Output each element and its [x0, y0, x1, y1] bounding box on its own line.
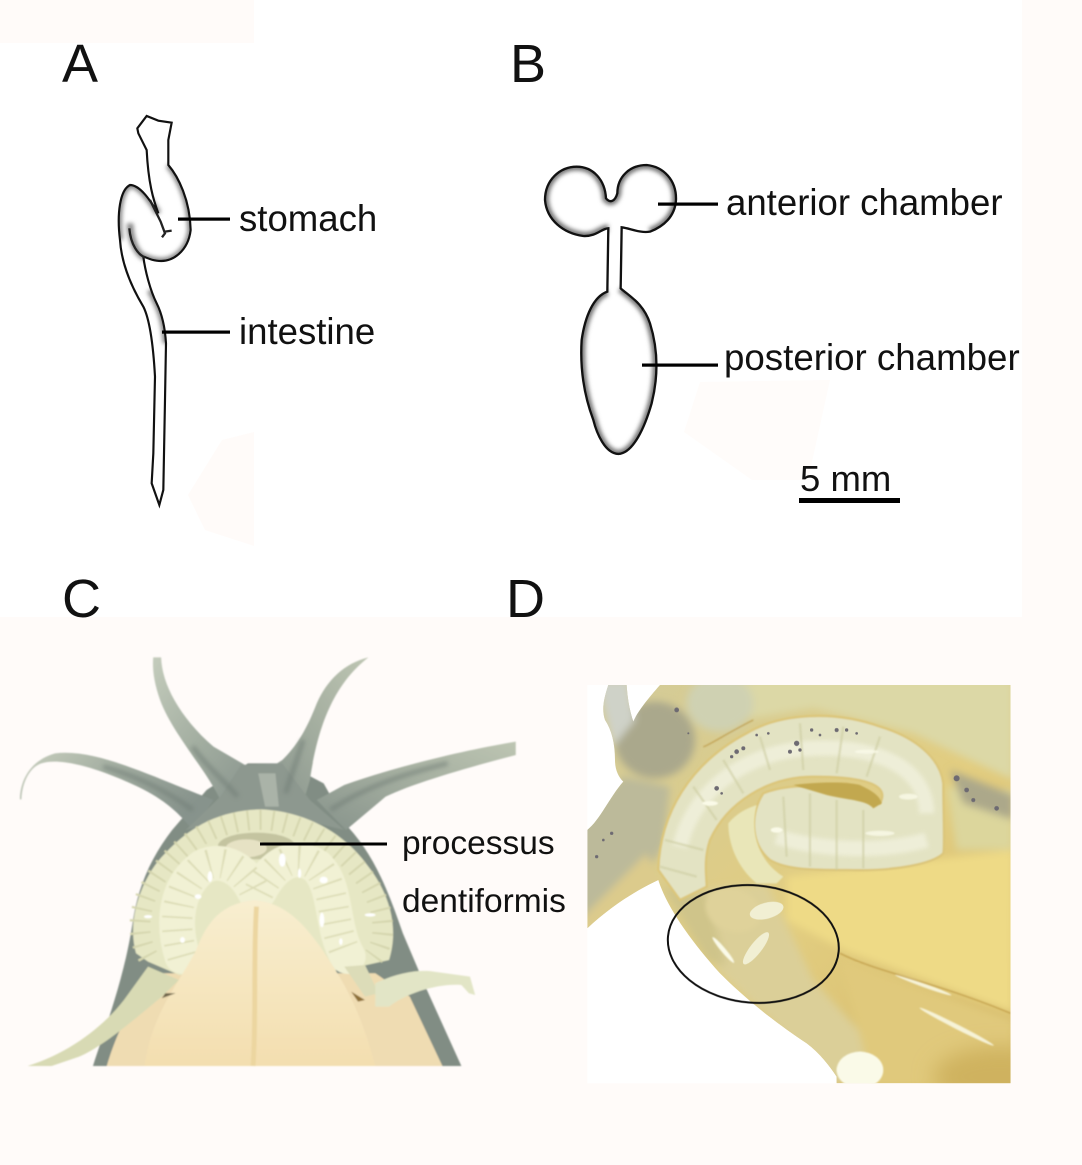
leader line: posterior chamber	[642, 364, 718, 367]
dark speckles	[595, 708, 999, 858]
mouth and processus dentiformis	[218, 833, 295, 859]
label: stomach: stomach	[239, 198, 377, 239]
leader line: stomach	[178, 218, 230, 221]
circled detail	[663, 878, 844, 1010]
scale bar	[799, 498, 900, 503]
lip band	[658, 716, 944, 900]
foot	[145, 900, 375, 1066]
panel letter C: C	[62, 569, 101, 629]
photo: close-up of lip with circled detail	[587, 685, 1011, 1084]
lower right shade	[930, 1041, 1011, 1084]
scale bar label: 5 mm	[800, 458, 891, 499]
panel D: close-up photograph	[510, 580, 1011, 1084]
label: intestine: intestine	[239, 311, 375, 352]
leader line: anterior chamber	[658, 202, 718, 206]
leader line: intestine	[162, 330, 230, 334]
leader line: processus dentiformis	[260, 842, 387, 846]
outer lip	[140, 820, 383, 957]
label: posterior chamber: posterior chamber	[724, 337, 1020, 378]
white upper panel background	[0, 0, 1022, 617]
panel C: snail head photograph	[20, 569, 566, 1066]
label: anterior chamber: anterior chamber	[726, 182, 1002, 223]
label: processus dentiformis	[402, 825, 566, 920]
lip glow	[680, 748, 927, 848]
tentacle top right	[262, 657, 368, 803]
lip highlights	[144, 853, 376, 945]
segment shading	[660, 723, 880, 877]
highlights	[702, 750, 995, 1088]
tentacle dark streaks	[103, 740, 448, 810]
side body	[107, 973, 442, 1066]
drawing: stomach and intestine	[119, 116, 191, 505]
lip base	[133, 809, 393, 975]
head centre	[186, 763, 344, 830]
inner crescent	[728, 805, 783, 883]
white grains	[742, 902, 784, 965]
tentacle top left	[153, 657, 269, 800]
body mantle	[93, 763, 461, 1066]
tinted patch right	[684, 380, 830, 480]
inner lip	[177, 860, 348, 957]
tentacle left	[20, 753, 213, 830]
soft colour zones	[580, 675, 1013, 1087]
label: processus dentiformis: dentiformis	[402, 883, 566, 920]
lower right stub	[344, 965, 379, 997]
panel B: anterior and posterior chambers	[510, 34, 1020, 503]
lower left tentacle	[28, 967, 179, 1066]
panel A: stomach and intestine	[62, 34, 377, 505]
panel letter D: D	[506, 569, 545, 629]
lower right tentacle	[375, 971, 475, 1007]
mouth gap	[793, 782, 882, 808]
orange creases	[703, 720, 1011, 1013]
drawing: two-chambered stomach	[545, 165, 676, 454]
label: processus dentiformis: processus	[402, 825, 555, 862]
panel letter B: B	[510, 34, 546, 94]
tinted patch left	[188, 432, 254, 546]
panel letter A: A	[62, 34, 98, 94]
tentacle right	[317, 742, 516, 830]
lower lobe	[706, 902, 715, 920]
photo: snail mouth with tentacles	[20, 657, 516, 1066]
